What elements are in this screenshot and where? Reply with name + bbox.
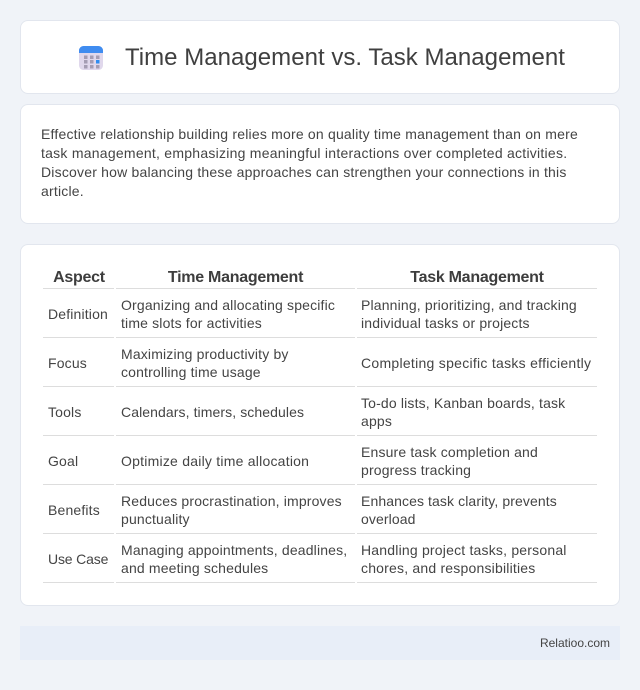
- table row: Benefits: Enhances task clarity, prevents: [361, 493, 557, 509]
- table row: Use Case: [43, 533, 597, 583]
- table row: Definition: individual tasks or projects: [361, 315, 530, 331]
- footer: [20, 626, 620, 660]
- table row: Use Case: Handling project tasks, personal: [361, 542, 567, 558]
- table row: Focus: Focus: [48, 355, 87, 371]
- panel: introduction: [20, 104, 620, 224]
- table row: Focus: Completing specific tasks efficiently: [361, 355, 591, 371]
- table row: Benefits: overload: [361, 511, 416, 527]
- table row: Definition: Planning, prioritizing, and tracking: [361, 297, 577, 313]
- table row: Use Case: and meeting schedules: [121, 560, 268, 576]
- table row: Goal: progress tracking: [361, 462, 471, 478]
- table row: Goal: Goal: [48, 453, 78, 469]
- table row: Tools: apps: [361, 413, 392, 429]
- table row: Goal: [43, 435, 597, 478]
- table row: Benefits: Benefits: [48, 502, 100, 518]
- text block: introduction: Effective relationship building relies more on quality time management than on mere: [41, 126, 578, 142]
- icon: calendar: [79, 46, 103, 70]
- table row: Focus: Maximizing productivity by: [121, 346, 289, 362]
- table row: Use Case: Use Case: [48, 551, 108, 567]
- table row: Definition: Organizing and allocating specific: [121, 297, 335, 313]
- table row: Tools: Tools: [48, 404, 81, 420]
- text block: introduction: Discover how balancing these approaches can strengthen your connections in this: [41, 164, 567, 180]
- table row: Use Case: chores, and responsibilities: [361, 560, 535, 576]
- table row: Focus: controlling time usage: [121, 364, 261, 380]
- table row: Tools: [43, 386, 597, 429]
- table row: Goal: Optimize daily time allocation: [121, 453, 309, 469]
- table row: Definition: [43, 288, 597, 331]
- table row: Goal: Ensure task completion and: [361, 444, 538, 460]
- table row: Benefits: [43, 484, 597, 527]
- panel: comparison table: [20, 244, 620, 606]
- table row: Definition: time slots for activities: [121, 315, 262, 331]
- table row: Definition: Definition: [48, 306, 108, 322]
- table row: Tools: To-do lists, Kanban boards, task: [361, 395, 565, 411]
- text block: introduction: task management, emphasizing meaningful interactions over completed activities.: [41, 145, 567, 161]
- title: Time Management vs. Task Management: [125, 44, 565, 71]
- table header: Aspect: [53, 269, 105, 286]
- table row: Benefits: Reduces procrastination, improves: [121, 493, 342, 509]
- table row: Focus: [43, 337, 597, 380]
- footer text: Relatioo.com: [540, 636, 610, 650]
- panel: title card: [20, 20, 620, 94]
- table header: Time Management: [168, 269, 303, 286]
- table header: [53, 269, 544, 286]
- table row: Benefits: punctuality: [121, 511, 190, 527]
- text block: introduction: article.: [41, 183, 84, 199]
- text block: introduction: [41, 126, 578, 199]
- table row: Tools: Calendars, timers, schedules: [121, 404, 304, 420]
- table header: Task Management: [410, 269, 544, 286]
- table row: Use Case: Managing appointments, deadlines,: [121, 542, 347, 558]
